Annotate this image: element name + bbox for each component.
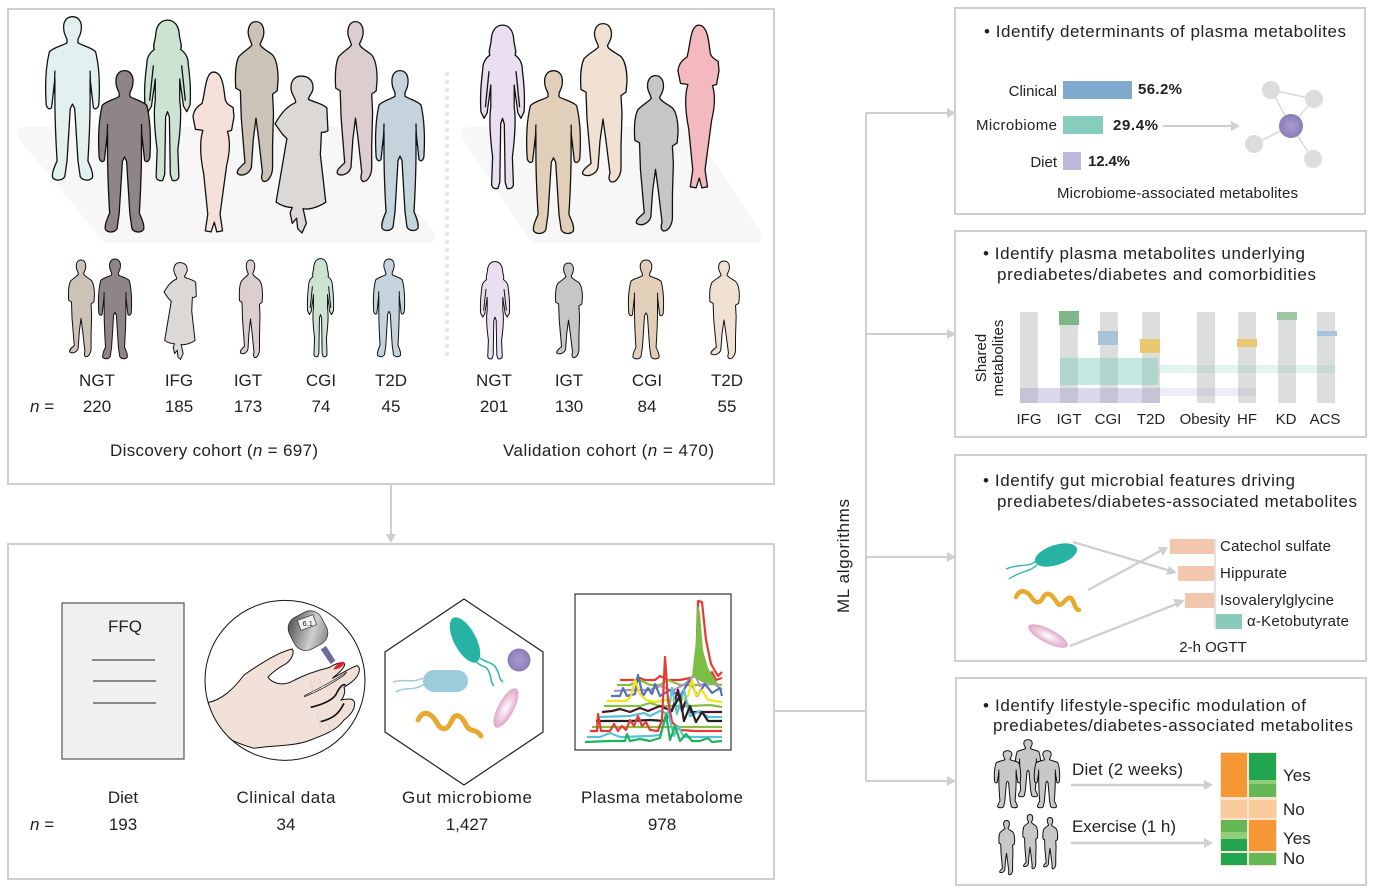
panel: gut microbial features: prediabetes/diabetes-associated metabolites (997, 492, 1357, 511)
heading: • Identify lifestyle-specific modulation of (983, 696, 1306, 715)
heading: • Identify determinants of plasma metabolites (984, 22, 1346, 41)
icon: hand with glucometer (205, 600, 365, 760)
data table labels (30, 788, 743, 834)
data table labels: Plasma metabolome (581, 788, 743, 807)
data table labels: n = (30, 815, 54, 834)
icon: diet group (994, 740, 1060, 808)
discovery cohort people (46, 17, 424, 233)
chart: shared metabolites (1020, 311, 1337, 403)
cohort table labels: n = (30, 397, 54, 416)
heatmap row labels: No (1283, 849, 1305, 868)
panel: metabolites underlying prediabetes (955, 231, 1366, 437)
blue bacterium (393, 670, 468, 692)
panel: lifestyle-specific modulation (956, 678, 1366, 885)
cohort table labels: T2D (375, 371, 407, 390)
floor: discovery (24, 134, 428, 236)
chart: metabolite bars: Isovalerylglycine (1220, 592, 1334, 609)
chart: metabolite bars: α-Ketobutyrate (1247, 613, 1349, 630)
panel: gut microbial features (955, 455, 1366, 661)
heading: • Identify gut microbial features driving (983, 471, 1295, 490)
icon: orange spirochete (1016, 591, 1079, 610)
cohort table labels: NGT (476, 371, 512, 390)
cohort table labels: CGI (306, 371, 336, 390)
axis categories: IGT (1056, 411, 1082, 428)
bar chart: variance explained: 29.4% (1113, 117, 1158, 134)
icon: teal bacterium (1006, 539, 1080, 579)
bar chart: variance explained (976, 81, 1182, 171)
cohort table labels: Discovery cohort (n = 697) (110, 441, 318, 460)
chart: plasma metabolome spectra (575, 594, 731, 750)
cohort table labels: T2D (711, 371, 743, 390)
bar chart: variance explained: Microbiome (976, 117, 1057, 134)
axis categories: KD (1276, 411, 1297, 428)
axis categories: HF (1237, 411, 1257, 428)
chart: metabolite bars (1170, 538, 1349, 656)
label and arrow: diet (1071, 760, 1213, 790)
cohort table labels: 45 (382, 397, 400, 416)
cohort table labels: IFG (165, 371, 193, 390)
data table labels: 978 (648, 815, 676, 834)
arrows: microbes to metabolites (1070, 542, 1185, 646)
floor: validation (468, 134, 755, 236)
axis categories: Obesity (1180, 411, 1231, 428)
icon: FFQ sheet (62, 603, 184, 759)
pink rod (489, 685, 523, 731)
chart: metabolite bars: Hippurate (1220, 565, 1287, 582)
bar chart: variance explained: 56.2% (1138, 81, 1182, 98)
panel: lifestyle-specific modulation: prediabetes/diabetes-associated metabolites (993, 716, 1353, 735)
icon: hand with glucometer: 6.1 (303, 619, 313, 628)
heading: • Identify plasma metabolites underlying (983, 244, 1305, 263)
data table labels: Gut microbiome (402, 788, 532, 807)
validation cohort people (481, 24, 719, 233)
cohort table labels: 201 (480, 397, 508, 416)
panel: metabolites underlying prediabetes: prediabetes/diabetes and comorbidities (997, 265, 1316, 284)
heatmap row labels: Yes (1283, 766, 1311, 785)
bar chart: variance explained: 12.4% (1088, 153, 1130, 170)
data table labels: 193 (109, 815, 137, 834)
cohort table labels: 74 (312, 397, 330, 416)
cohort table labels: CGI (632, 371, 662, 390)
cohort table labels: 55 (718, 397, 736, 416)
bar chart: variance explained: Clinical (1009, 83, 1057, 100)
chart: metabolite bars: Catechol sulfate (1220, 538, 1331, 555)
orange spirochete (418, 713, 481, 736)
data table labels: Clinical data (236, 788, 336, 807)
data table labels: 1,427 (446, 815, 488, 834)
heatmap (1220, 752, 1277, 866)
panel: data types (8, 544, 774, 879)
finger gap (304, 672, 347, 697)
heatmap row labels: No (1283, 800, 1305, 819)
axis categories (1016, 411, 1340, 428)
panel: cohorts (8, 9, 774, 484)
cohort table labels: 173 (234, 397, 262, 416)
axis categories: CGI (1095, 411, 1121, 428)
cohort table labels: 84 (638, 397, 656, 416)
arrow: cohorts to data (386, 485, 396, 543)
heatmap row labels: Yes (1283, 829, 1311, 848)
arrows: ML algorithms connector (775, 108, 956, 786)
label: ML algorithms: ML algorithms (834, 499, 853, 613)
data table labels: 34 (277, 815, 295, 834)
axis label (973, 320, 1007, 396)
cohort table labels: Validation cohort (n = 470) (503, 441, 714, 460)
caption: Microbiome-associated metabolites (1057, 185, 1298, 202)
chart: metabolite bars: 2-h OGTT (1179, 639, 1247, 656)
bar chart: variance explained: Diet (1030, 154, 1058, 171)
cohort table labels: IGT (555, 371, 583, 390)
axis label: metabolites (990, 320, 1007, 396)
heatmap row labels (1283, 766, 1311, 868)
label and arrow: exercise: Exercise (1 h) (1072, 817, 1176, 836)
cohort table labels: IGT (234, 371, 262, 390)
network diagram (1245, 81, 1323, 168)
icon: exercise group (999, 815, 1058, 875)
axis categories: ACS (1310, 411, 1340, 428)
panel: determinants of plasma metabolites (955, 8, 1365, 214)
cohort table labels: 220 (83, 397, 111, 416)
icon: pink rod (1025, 620, 1071, 652)
arrow: to network (1163, 121, 1240, 131)
teal bacterium (444, 613, 503, 686)
purple coccus (508, 648, 530, 672)
cohort table labels: NGT (79, 371, 115, 390)
cohort table labels: 130 (555, 397, 583, 416)
axis categories: T2D (1137, 411, 1165, 428)
icon: gut microbiome hexagon (385, 599, 543, 785)
cohort table labels: 185 (165, 397, 193, 416)
label and arrow: exercise (1071, 817, 1213, 848)
axis label: Shared (973, 334, 990, 382)
cohort table labels (30, 371, 743, 460)
small people by group (68, 259, 739, 359)
icon: FFQ sheet: FFQ (108, 617, 142, 636)
data table labels: Diet (108, 788, 138, 807)
axis categories: IFG (1016, 411, 1042, 428)
label and arrow: diet: Diet (2 weeks) (1072, 760, 1183, 779)
